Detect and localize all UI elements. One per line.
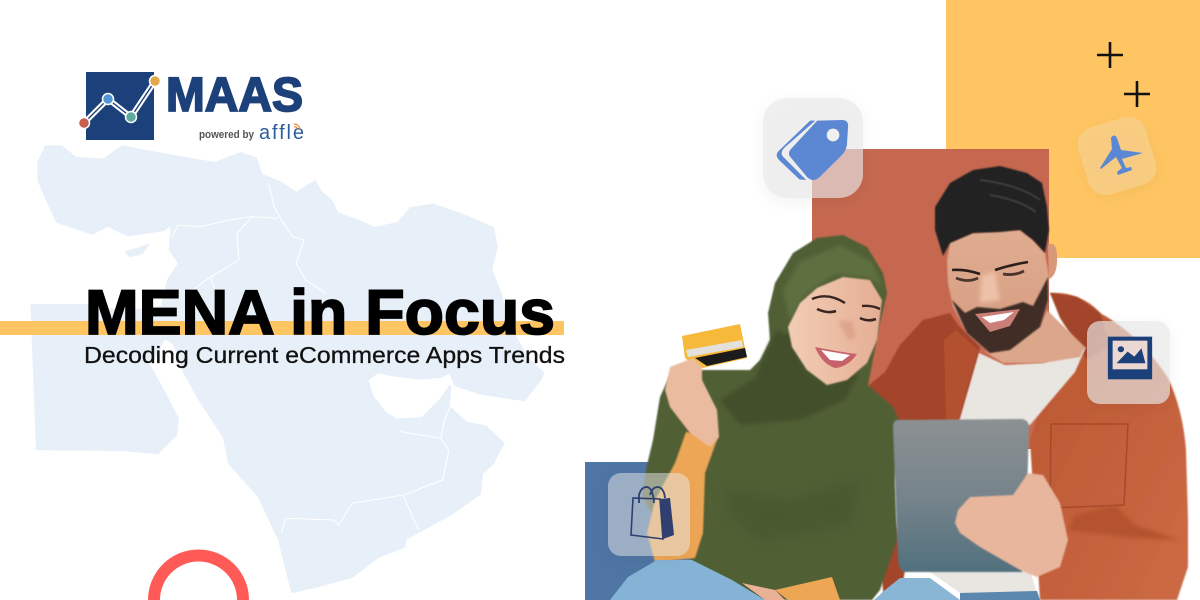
man collar right — [1050, 293, 1110, 360]
man ear — [1048, 244, 1057, 279]
card: picture — [1087, 321, 1170, 404]
card background — [608, 473, 690, 556]
man shirt left — [869, 313, 980, 600]
icon: shopping bag — [631, 487, 674, 539]
man nose highlight — [980, 272, 1000, 303]
blue background block — [585, 462, 705, 600]
logo mark: chart square — [78, 72, 160, 140]
photo: smiling couple with tablet and card — [610, 166, 1188, 600]
man brows and eyes — [952, 262, 1028, 274]
man beard — [952, 277, 1048, 353]
terracotta background block — [812, 149, 1049, 449]
title highlight bar — [0, 321, 564, 335]
woman lips and smile — [815, 347, 857, 368]
credit card — [682, 324, 747, 369]
plus signs — [1097, 42, 1150, 107]
title: MENA in Focus — [85, 278, 555, 348]
man mouth — [975, 309, 1020, 332]
affle wordmark: affle — [259, 122, 304, 144]
yellow background block — [946, 0, 1200, 258]
woman orange sleeve — [647, 432, 718, 562]
man t-shirt — [958, 347, 1086, 425]
woman dress and hijab — [642, 235, 900, 600]
card: airplane — [1073, 112, 1161, 200]
woman lower sleeve and forearm — [742, 583, 785, 600]
man neck — [982, 310, 1085, 363]
icon: airplane — [1100, 136, 1143, 175]
woman hijab folds — [783, 245, 884, 320]
logo wordmark: MAAS — [166, 69, 303, 122]
man jeans — [874, 578, 960, 600]
man hair — [935, 166, 1049, 256]
card: price tag — [763, 98, 863, 198]
icon: picture frame — [1108, 337, 1152, 379]
logo: MAAS powered by affle — [78, 69, 304, 144]
man — [869, 166, 1188, 600]
woman jeans — [610, 560, 765, 600]
decorative red ring — [154, 556, 243, 600]
card background — [1073, 112, 1161, 200]
woman — [610, 235, 900, 600]
subtitle: Decoding Current eCommerce Apps Trends — [84, 342, 565, 368]
man hand — [955, 473, 1068, 577]
woman hand — [665, 358, 719, 447]
icon: affle signal arcs — [294, 124, 300, 130]
powered by: powered by — [199, 129, 255, 141]
man sleeve fold — [1068, 505, 1180, 540]
icon: tag — [777, 120, 848, 180]
woman brows and eyes — [812, 296, 880, 309]
man shirt right — [1030, 293, 1188, 600]
card: shopping bag — [608, 473, 690, 556]
card background — [1087, 321, 1170, 404]
tablet — [893, 419, 1029, 572]
woman face — [788, 277, 882, 385]
card background — [763, 98, 863, 198]
map: Middle East and North Africa — [31, 147, 543, 592]
woman nose shadow — [838, 320, 856, 340]
man shirt pocket — [1050, 424, 1128, 508]
man face — [947, 230, 1049, 353]
